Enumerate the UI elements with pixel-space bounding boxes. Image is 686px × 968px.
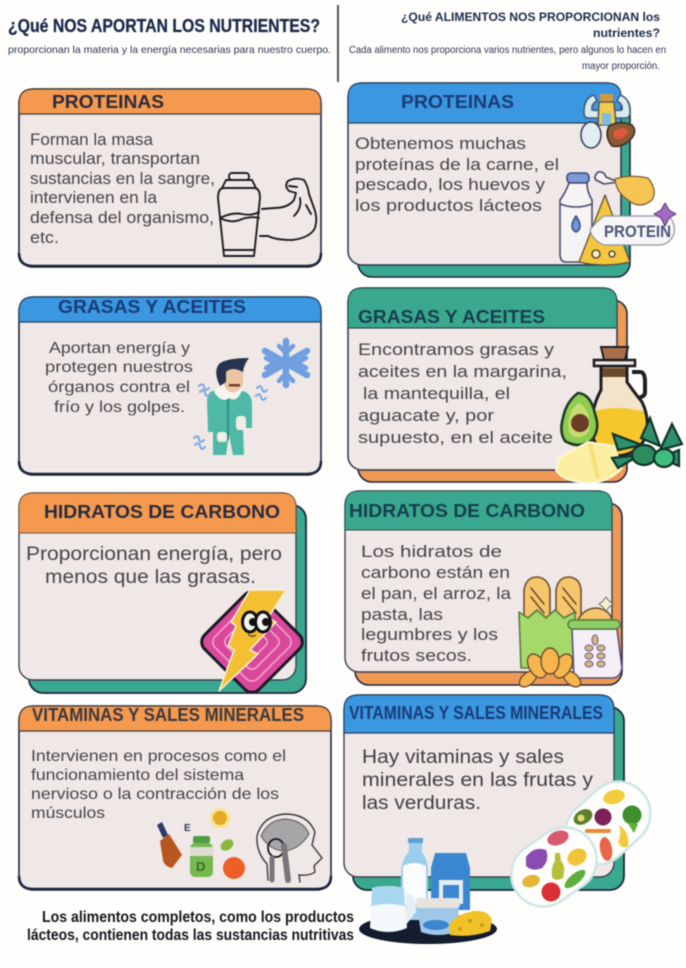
vertical divider — [337, 5, 339, 82]
heading: VITAMINAS Y SALES MINERALES — [32, 705, 304, 725]
label: PROTEIN: PROTEIN — [604, 222, 671, 241]
body text — [355, 134, 559, 215]
footer note — [27, 909, 354, 944]
body text — [26, 544, 282, 588]
icon: shaker and flexed arm — [218, 173, 316, 256]
body text: el pan, el arroz, la — [361, 584, 512, 603]
icon: dairy products — [359, 838, 497, 944]
heading: PROTEINAS — [52, 92, 164, 112]
header: which foods provide nutrients: nutrientes? — [593, 26, 660, 40]
heading: VITAMINAS Y SALES MINERALES — [349, 703, 603, 723]
panel: carbohydrates function — [19, 493, 306, 696]
body text: las verduras. — [362, 793, 481, 814]
body text: músculos — [31, 805, 105, 822]
icon: vitamins and brain — [157, 810, 322, 882]
icon: lightning bolt on pink diamond — [198, 588, 306, 696]
panel: fats function — [19, 297, 321, 475]
body text: funcionamiento del sistema — [31, 767, 244, 784]
panel: fat foods — [348, 288, 682, 483]
header: which foods provide nutrients: Cada alimento nos proporciona varios nutrientes, pero algunos lo hacen en — [349, 45, 666, 56]
body text — [30, 130, 215, 247]
header: which foods provide nutrients — [349, 10, 666, 72]
panel: vitamins function — [19, 705, 331, 890]
body text: carbono están en — [361, 563, 510, 582]
body text: minerales en las frutas y — [362, 770, 594, 791]
panel: carbohydrate foods — [345, 491, 622, 690]
body text: Aportan energía y — [49, 340, 190, 357]
body text: pescado, los huevos y — [355, 175, 546, 194]
body text: aguacate y, por — [358, 406, 494, 425]
body text: etc. — [30, 228, 59, 247]
footer note: Los alimentos completos, como los productos — [42, 909, 354, 926]
body text: nervioso o la contracción de los — [31, 786, 279, 803]
header: which foods provide nutrients: mayor proporción. — [582, 61, 660, 72]
heading: HIDRATOS DE CARBONO — [44, 502, 280, 522]
body text: Obtenemos muchas — [355, 134, 526, 153]
body text: órganos contra el — [48, 379, 190, 396]
body text: menos que las grasas. — [45, 567, 256, 588]
body text — [358, 340, 567, 447]
heading: PROTEINAS — [401, 92, 514, 112]
body text: frutos secos. — [361, 646, 472, 665]
body text: Hay vitaminas y sales — [362, 747, 564, 768]
body text — [45, 340, 193, 416]
body text: protegen nuestros — [45, 359, 193, 376]
body text: pasta, las — [361, 605, 443, 624]
body text: los productos lácteos — [355, 196, 542, 215]
body text: Forman la masa — [30, 130, 154, 149]
body text: proteínas de la carne, el — [355, 155, 559, 174]
icon: person shivering with snowflake — [194, 341, 307, 455]
panel: vitamin foods — [344, 695, 664, 919]
icon: vitamins and brain: D — [196, 859, 205, 874]
body text: la mantequilla, el — [363, 384, 510, 403]
body text: intervienen en la — [30, 188, 158, 207]
panel: proteins function — [19, 89, 321, 267]
body text: defensa del organismo, — [30, 208, 214, 227]
body text: muscular, transportan — [30, 149, 200, 168]
icon: oil, avocado, butter and olives — [556, 347, 682, 483]
body text: Proporcionan energía, pero — [26, 544, 282, 565]
body text — [31, 748, 286, 822]
header: what nutrients give us: ¿Qué NOS APORTAN LOS NUTRIENTES? — [8, 16, 320, 36]
body text: Encontramos grasas y — [358, 340, 555, 359]
header: what nutrients give us — [8, 16, 331, 56]
body text: legumbres y los — [361, 625, 498, 644]
header: what nutrients give us: proporcionan la materia y la energía necesarias para nuestro cuerpo. — [8, 44, 331, 56]
body text: sustancias en la sangre, — [30, 169, 215, 188]
body text: Los hidratos de — [361, 542, 502, 561]
icon: vitamins and brain: E — [184, 823, 191, 834]
body text: aceites en la margarina, — [358, 362, 567, 381]
heading: HIDRATOS DE CARBONO — [349, 501, 585, 521]
body text: Intervienen en procesos como el — [31, 748, 286, 765]
icon: protein foods collection — [560, 94, 676, 265]
heading: GRASAS Y ACEITES — [358, 307, 545, 327]
icon: bread, grain jar and croissant — [516, 577, 622, 690]
body text: frío y los golpes. — [54, 399, 185, 416]
panel: protein foods — [348, 83, 676, 277]
body text: supuesto, en el aceite — [358, 428, 553, 447]
heading: GRASAS Y ACEITES — [58, 297, 246, 317]
footer note: lácteos, contienen todas las sustancias nutritivas — [27, 927, 354, 944]
body text — [361, 542, 512, 665]
icon: food capsules — [499, 768, 664, 919]
body text — [362, 747, 594, 814]
header: which foods provide nutrients: ¿Qué ALIMENTOS NOS PROPORCIONAN los — [401, 10, 660, 24]
